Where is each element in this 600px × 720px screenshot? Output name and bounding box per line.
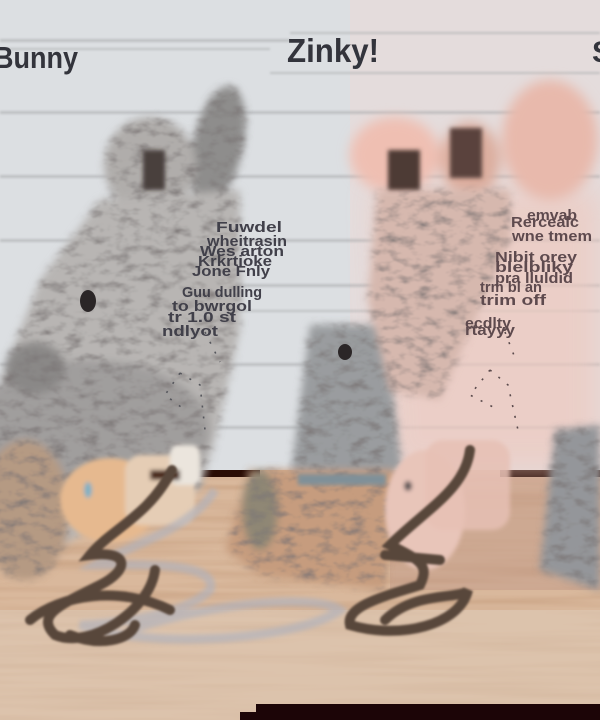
collar xyxy=(298,474,386,485)
text block: right: ecdlty xyxy=(465,315,512,332)
text block: left: Jone Fnly xyxy=(192,263,271,280)
text block: left: tr 1.0 st xyxy=(168,309,236,326)
wall background xyxy=(0,0,600,480)
text block: right: emvab xyxy=(527,207,577,224)
text block: left: Wes arton xyxy=(200,243,284,260)
text block: right: pra lluldid xyxy=(495,270,573,287)
text block: right: Nibit orey xyxy=(495,249,578,266)
ghost loop: blue-grey rope shadow xyxy=(80,490,340,639)
text block: right xyxy=(465,207,592,339)
heading: centre: Zinky! xyxy=(287,32,379,69)
rabbit: tan and grey centre xyxy=(225,325,402,590)
wooden floor xyxy=(0,470,600,720)
text block: right: wne tmem xyxy=(511,228,592,245)
text block: right: trim off xyxy=(480,292,547,309)
inner ear patch xyxy=(143,150,165,190)
text block: left: ndlyot xyxy=(162,323,218,340)
text block: right: blelbliky xyxy=(495,259,574,276)
text block: left xyxy=(162,219,287,340)
pink background glow xyxy=(375,190,600,470)
text block: right: trm bl an xyxy=(480,279,542,296)
dotted arrow: right xyxy=(470,332,518,430)
inner ear patch: far right xyxy=(450,128,482,178)
toy: right xyxy=(385,440,510,570)
baseboard shadow xyxy=(70,470,600,477)
text block: right: Rercealc xyxy=(511,214,579,231)
text block: left: Krkrtioke xyxy=(198,253,272,270)
bottom black bar xyxy=(240,704,600,720)
text block: left: wheitrasin xyxy=(206,233,287,250)
rope: right xyxy=(350,450,470,631)
rabbit: pink right xyxy=(350,80,600,590)
eye: centre rabbit xyxy=(338,344,352,360)
rope: left xyxy=(30,470,172,641)
text block: left: Guu dulling xyxy=(182,284,262,301)
dotted arrow: left xyxy=(165,332,220,430)
rabbit: grey left xyxy=(0,81,255,580)
inner ear patch: right xyxy=(388,150,420,190)
text block: left: Fuwdel xyxy=(216,219,282,236)
toy: left xyxy=(60,445,200,542)
eye: grey rabbit xyxy=(80,290,96,312)
text block: right: rtayyy xyxy=(465,322,516,339)
text block: left: to bwrgol xyxy=(172,298,252,315)
